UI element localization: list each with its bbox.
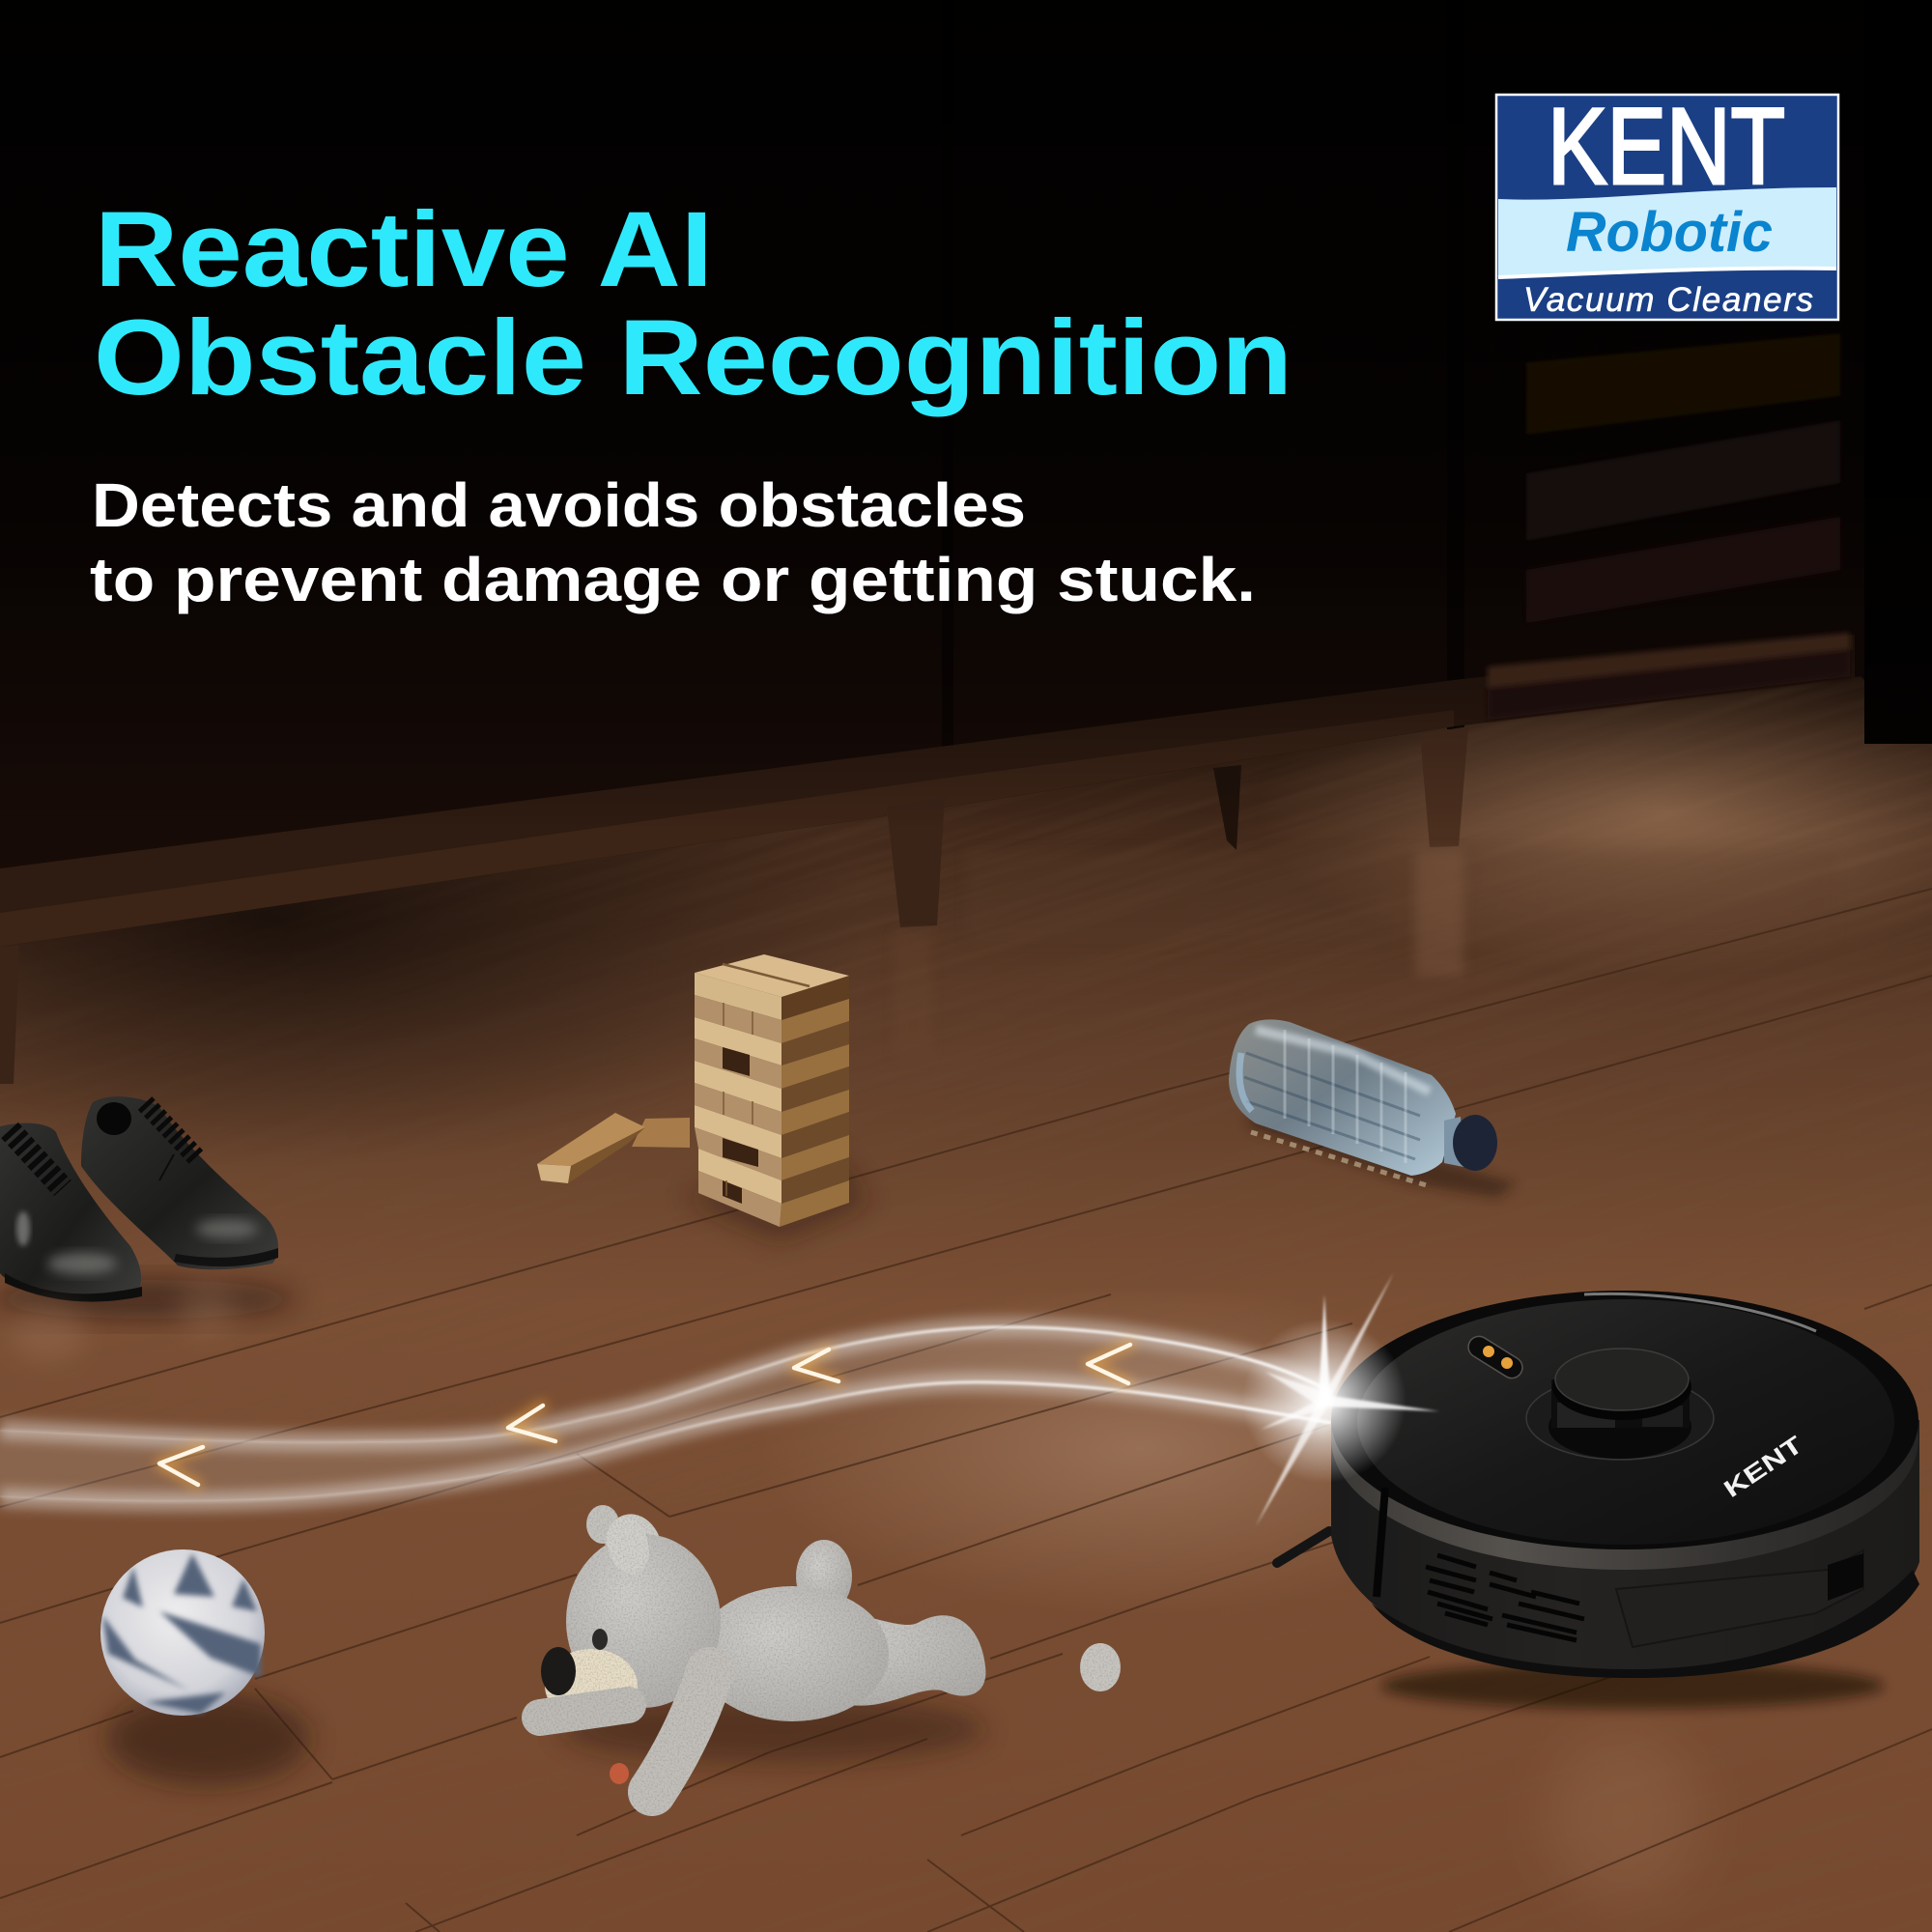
body <box>696 1586 889 1721</box>
head <box>566 1534 721 1708</box>
floor plank seams <box>0 889 1932 1932</box>
bear plush <box>540 1505 1121 1792</box>
direction chevrons <box>159 1345 1130 1485</box>
sensor window <box>1828 1553 1863 1601</box>
hind legs <box>796 1540 852 1613</box>
subtitle: Detects and avoids obstacles <box>92 470 1026 540</box>
headlight glint <box>1242 1272 1439 1526</box>
eye <box>592 1629 608 1650</box>
top darkening overlay <box>0 0 1932 831</box>
KENT Robotic logo: KENT <box>1548 86 1785 207</box>
lidar turret <box>1526 1349 1714 1460</box>
title <box>94 190 1293 417</box>
wooden block tower <box>537 954 869 1241</box>
KENT Robotic logo: Robotic <box>1566 201 1773 264</box>
logo light band <box>1498 187 1836 277</box>
ears <box>586 1505 619 1544</box>
furniture: cabinet <box>0 0 1932 1084</box>
light trail <box>0 1327 1331 1502</box>
title: Reactive AI <box>95 190 713 309</box>
tower gaps <box>723 1047 750 1076</box>
cabinet base rail <box>0 635 1855 947</box>
orange bead <box>610 1763 629 1784</box>
snout <box>545 1649 638 1722</box>
right arm <box>652 1671 710 1792</box>
robot KENT label: KENT <box>1719 1431 1808 1503</box>
tower right face <box>780 976 849 1227</box>
bumper ring <box>1331 1309 1918 1570</box>
subtitle <box>90 470 1256 614</box>
tower top <box>695 954 849 997</box>
vent <box>1426 1555 1584 1640</box>
status buttons <box>1464 1332 1526 1382</box>
bottle cap <box>1444 1117 1463 1167</box>
front seam <box>1377 1488 1385 1597</box>
shelf unit slats <box>1488 333 1850 720</box>
nose <box>541 1647 576 1695</box>
KENT Robotic logo <box>1496 86 1838 320</box>
shoes <box>0 1096 299 1362</box>
top face <box>1357 1299 1894 1545</box>
tower block joints <box>724 1003 753 1196</box>
left paw <box>540 1705 628 1718</box>
KENT Robotic logo: Vacuum Cleaners <box>1523 281 1813 319</box>
side brush <box>1277 1531 1329 1563</box>
water bottle <box>1229 1019 1517 1198</box>
chevron glow <box>159 1345 1130 1485</box>
glint rays <box>1256 1272 1439 1526</box>
striped ball <box>100 1549 309 1785</box>
top rim <box>1331 1291 1918 1549</box>
subtitle: to prevent damage or getting stuck. <box>90 545 1256 614</box>
leg reflections <box>894 932 932 1058</box>
robot vacuum <box>1277 1291 1919 1709</box>
front shoe <box>0 1123 141 1300</box>
bottle caustics <box>1251 1132 1430 1186</box>
small ball <box>1080 1643 1121 1691</box>
access panel <box>1616 1550 1863 1647</box>
title: Obstacle Recognition <box>94 298 1293 417</box>
tower left face <box>695 973 781 1227</box>
fallen block <box>632 1118 690 1148</box>
base shadow band <box>1372 1570 1919 1678</box>
cabinet legs <box>887 797 945 927</box>
back shoe <box>81 1096 278 1269</box>
floor <box>0 647 1932 1932</box>
teddy bear <box>540 1505 1121 1792</box>
body side <box>1331 1420 1919 1678</box>
